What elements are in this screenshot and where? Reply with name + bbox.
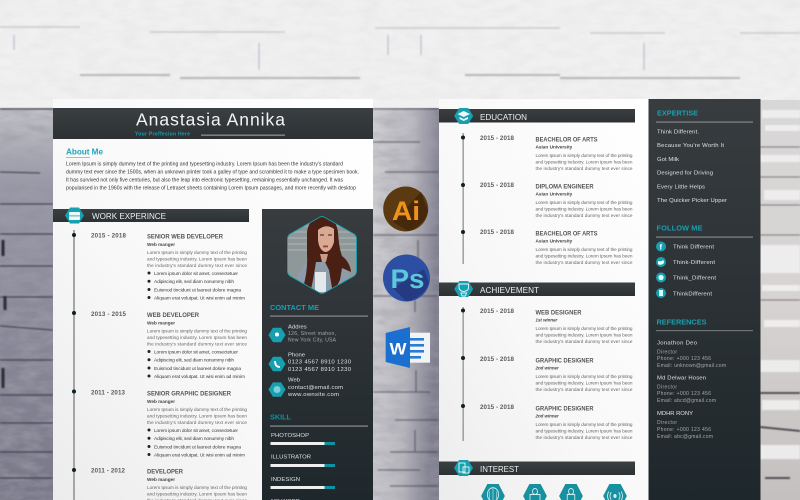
job: web developer: Web manger <box>147 320 175 326</box>
achievement: graphic designer <box>480 356 633 392</box>
job: developer <box>91 468 247 500</box>
job: senior graphic designer: and typesetting industry. Lorem Ipsum has been <box>147 414 247 418</box>
contact: address: Addres <box>288 324 307 330</box>
contact: web: contact@email.com <box>288 385 343 391</box>
interest: signal <box>603 484 627 500</box>
reference: MDHR RONY <box>657 411 713 440</box>
about me: It has survived not only five centuries, but also the leap into electronic typesetting, remaining essentially unchanged. It was <box>66 178 343 184</box>
contact: address: 126, Street mahon, <box>288 331 336 337</box>
job: senior graphic designer: Lorem ipsum dolor sit amet, consectetuer <box>154 428 238 434</box>
expertise list: Designed for Driving <box>657 170 713 176</box>
heading: interest <box>439 460 635 476</box>
job: senior web developer: 2015 - 2018 <box>91 232 127 240</box>
icon: Adobe Illustrator <box>383 186 428 232</box>
education: diploma engineer: DIPLOMA ENGINEER <box>536 184 594 190</box>
contact: phone: 0123 4567 8910 1230 <box>288 367 352 373</box>
contact: address <box>268 324 337 344</box>
heading: work experience: WORK EXPERINCE <box>92 212 166 221</box>
social: facebook: f <box>660 242 662 252</box>
job: senior web developer: SENIOR WEB DEVELOPER <box>147 234 224 240</box>
panel: right resume page <box>439 99 649 500</box>
expertise list <box>656 108 753 204</box>
reference: Md Delwar Hosen: Phone: +000 123 456 <box>657 391 711 397</box>
header band: Anastasia Annika <box>136 110 285 130</box>
reference: Md Delwar Hosen: Md Delwar Hosen <box>657 376 706 382</box>
job: developer: DEVELOPER <box>147 468 183 476</box>
interest: figure <box>559 484 583 500</box>
job: developer: Lorem Ipsum is simply dummy text of the printing <box>147 485 247 490</box>
timeline: work <box>72 230 76 500</box>
achievement: web designer: Lorem Ipsum is simply dummy text of the printing <box>536 326 633 331</box>
job: senior graphic designer: Aliquam erat volutpat. Ut wisi enim ad minim <box>154 452 245 458</box>
job: senior graphic designer: SENIOR GRAPHIC DESIGNER <box>147 390 232 398</box>
reference: Jonathon Deo: Director <box>657 350 677 356</box>
heading: achievement <box>439 281 635 297</box>
job: senior graphic designer: Lorem Ipsum is simply dummy text of the printing <box>147 407 247 412</box>
expertise list: Every Little Helps <box>657 184 705 190</box>
job: senior web developer: Lorem Ipsum is simply dummy text of the printing <box>147 250 247 255</box>
education: beachelor of arts second: 2015 - 2018 <box>480 229 515 236</box>
education: beachelor of arts second <box>480 229 633 265</box>
job: senior graphic designer: Adipiscing elit, sed diam nonummy nibh <box>154 436 234 442</box>
job: web developer: Euismod tincidunt ut laoreet dolore magna <box>154 366 241 372</box>
reference: Md Delwar Hosen: Email: abcd@gmail.com <box>657 398 716 404</box>
about me: popularised in the 1960s with the release of Letraset sheets containing Lorem Ipsum passages, and more recently with desktop <box>66 186 356 192</box>
education: beachelor of arts: 2015 - 2018 <box>480 135 515 142</box>
skill bars: SKILL <box>270 412 291 422</box>
contact: phone: 0123 4567 8910 1230 <box>288 360 352 366</box>
achievement: graphic designer second: 2nd winner <box>534 413 559 418</box>
job: senior web developer: Web manger <box>147 242 175 247</box>
job: senior graphic designer <box>91 390 247 458</box>
job: senior web developer <box>91 232 247 302</box>
reference: Jonathon Deo: Phone: +000 123 456 <box>657 356 711 362</box>
about me <box>66 148 359 192</box>
about me: Lorem Ipsum is simply dummy text of the printing and typesetting industry. Lorem Ipsum has been the industry's standard <box>66 162 343 168</box>
achievement: graphic designer second: and typesetting industry. Lorem Ipsum has been <box>536 428 633 434</box>
education: diploma engineer: Lorem Ipsum is simply dummy text of the printing <box>536 200 633 205</box>
job: web developer: WEB DEVELOPER <box>147 312 199 319</box>
reference: Jonathon Deo: Email: unknown@gmail.com <box>657 363 726 369</box>
reference: MDHR RONY: MDHR RONY <box>657 411 693 417</box>
achievement: graphic designer second: 2015 - 2018 <box>480 404 515 411</box>
reference: MDHR RONY: Phone: +000 123 456 <box>657 427 711 433</box>
job: senior web developer: Lorem ipsum dolor sit amet, consectetuer <box>154 271 238 277</box>
heading: education: EDUCATION <box>480 113 527 122</box>
contact: phone <box>268 352 352 373</box>
education: beachelor of arts second: Asian University <box>536 238 573 244</box>
job: senior web developer: Aliquam erat volutpat. Ut wisi enim ad minim <box>154 296 245 302</box>
panel: left sidebar <box>262 209 373 500</box>
icon: Adobe Photoshop <box>383 254 430 302</box>
achievement: web designer: WEB DESIGNER <box>536 310 582 316</box>
about me: dummy text ever since the 1500s, when an unknown printer took a galley of type and scrambled it to make a type specimen book. <box>66 170 359 176</box>
job: web developer: and typesetting industry. Lorem Ipsum has been <box>147 335 247 340</box>
job: senior graphic designer: 2011 - 2013 <box>91 390 126 396</box>
achievement: web designer: 1st winner <box>536 317 558 322</box>
achievement: web designer <box>480 308 633 344</box>
skill bars: INDESIGN <box>271 477 300 483</box>
achievement: graphic designer: Lorem Ipsum is simply dummy text of the printing <box>536 374 633 379</box>
job: developer: 2011 - 2012 <box>91 468 126 474</box>
achievement: graphic designer second <box>480 404 633 440</box>
education: beachelor of arts second: BEACHELOR OF ARTS <box>536 230 598 238</box>
education: beachelor of arts: Asian University <box>536 144 573 150</box>
skill bars: PHOTOSHOP <box>271 433 309 439</box>
interest: people <box>523 484 547 500</box>
job: senior graphic designer: the industry's standard dummy text ever since <box>147 420 247 425</box>
education: diploma engineer <box>480 182 633 218</box>
achievement: graphic designer: 2nd winner <box>534 365 559 370</box>
education: beachelor of arts: the industry's standard dummy text ever since <box>536 166 633 171</box>
achievement: graphic designer second: Lorem Ipsum is simply dummy text of the printing <box>536 422 633 427</box>
job: web developer: 2013 - 2015 <box>91 311 127 318</box>
job: web developer <box>91 311 247 380</box>
education: beachelor of arts <box>480 135 633 171</box>
reference: Jonathon Deo: Jonathon Deo <box>657 340 698 346</box>
reference: Md Delwar Hosen: Director <box>657 384 677 390</box>
timeline: education <box>461 133 465 264</box>
social: facebook: Think Different <box>673 244 714 250</box>
social: facebook <box>656 242 714 252</box>
achievement: graphic designer: the industry's standard dummy text ever since <box>536 387 633 392</box>
reference: Jonathon Deo <box>657 340 726 369</box>
heading: education <box>439 108 635 124</box>
expertise list: Got Milk <box>657 157 679 163</box>
contact me: CONTACT ME <box>270 303 319 312</box>
contact: web <box>268 378 343 398</box>
contact: web: Web <box>288 378 301 384</box>
icon: Adobe Photoshop: Ps <box>390 264 424 294</box>
reference: MDHR RONY: Director <box>657 420 677 426</box>
contact: address: New York City, USA <box>288 338 337 344</box>
job: senior graphic designer: Euismod tincidunt ut laoreet dolore magna <box>154 444 241 450</box>
panel: left resume page <box>53 99 373 500</box>
expertise list: Because You're Worth It <box>657 143 724 149</box>
achievement: graphic designer second: the industry's standard dummy text ever since <box>536 435 633 440</box>
about me: About Me <box>66 148 103 156</box>
job: senior web developer: the industry's standard dummy text ever since <box>147 263 247 268</box>
education: beachelor of arts: and typesetting industry. Lorem Ipsum has been <box>536 160 633 164</box>
job: developer: Web manger <box>147 477 175 482</box>
references <box>656 318 753 440</box>
portrait photo <box>287 216 357 294</box>
heading: achievement: ACHIEVEMENT <box>480 286 539 295</box>
reference: Md Delwar Hosen <box>657 376 716 404</box>
job: senior web developer: Euismod tincidunt ut laoreet dolore magna <box>154 288 241 294</box>
achievement: web designer: and typesetting industry. Lorem Ipsum has been <box>536 332 633 338</box>
social: skype: ThinkDifferent <box>673 292 712 298</box>
job: senior graphic designer: Web manger <box>147 399 175 404</box>
icon: Microsoft Word: W <box>390 340 408 358</box>
icon: Adobe Illustrator: Ai <box>392 196 420 226</box>
header band: Your Proffesion Here <box>135 132 190 138</box>
job: web developer: the industry's standard dummy text ever since <box>147 342 247 346</box>
education: beachelor of arts second: Lorem Ipsum is simply dummy text of the printing <box>536 247 633 252</box>
follow me <box>656 224 753 298</box>
education: diploma engineer: and typesetting industry. Lorem Ipsum has been <box>536 206 633 212</box>
social: twitter: Think-Different <box>673 260 715 266</box>
follow me: FOLLOW ME <box>656 224 703 232</box>
education: diploma engineer: the industry's standard dummy text ever since <box>536 213 633 218</box>
job: developer: and typesetting industry. Lorem Ipsum has been <box>147 492 247 496</box>
job: senior web developer: and typesetting industry. Lorem Ipsum has been <box>147 256 247 262</box>
achievement: web designer: the industry's standard dummy text ever since <box>536 339 633 344</box>
contact: web: www.ownsite.com <box>287 392 339 398</box>
job: web developer: Lorem ipsum dolor sit amet, consectetuer <box>154 350 238 356</box>
achievement: graphic designer: GRAPHIC DESIGNER <box>536 358 594 364</box>
expertise list: EXPERTISE <box>657 108 698 118</box>
references: REFERENCES <box>656 318 707 326</box>
achievement: graphic designer: and typesetting industry. Lorem Ipsum has been <box>536 380 633 386</box>
education: diploma engineer: 2015 - 2018 <box>480 182 515 189</box>
job: web developer: Lorem Ipsum is simply dummy text of the printing <box>147 328 247 334</box>
job: senior web developer: Adipiscing elit, sed diam nonummy nibh <box>154 279 234 285</box>
expertise list: Think Different. <box>657 130 699 136</box>
reference: MDHR RONY: Email: abc@gmail.com <box>657 434 713 440</box>
job: web developer: Aliquam erat volutpat. Ut wisi enim ad minim <box>154 374 245 380</box>
achievement: graphic designer: 2015 - 2018 <box>480 356 515 363</box>
panel: right sidebar <box>648 99 760 500</box>
education: diploma engineer: Asian University <box>536 192 573 196</box>
job: web developer: Adipiscing elit, sed diam nonummy nibh <box>154 358 234 364</box>
education: beachelor of arts second: and typesetting industry. Lorem Ipsum has been <box>536 254 633 258</box>
education: beachelor of arts second: the industry's standard dummy text ever since <box>536 260 633 265</box>
header band <box>53 108 373 139</box>
skill bars <box>270 412 368 500</box>
contact me <box>268 303 368 398</box>
icon: Microsoft Word <box>386 327 430 368</box>
social: instagram: Think_Different <box>673 276 716 282</box>
heading: work experience <box>53 208 249 224</box>
education: beachelor of arts: BEACHELOR OF ARTS <box>536 136 598 144</box>
achievement: web designer: 2015 - 2018 <box>480 308 515 315</box>
contact: phone: Phone <box>288 352 306 358</box>
interest: art <box>481 484 505 500</box>
achievement: graphic designer second: GRAPHIC DESIGNER <box>536 406 594 412</box>
skill bars: ILLUSTRATOR <box>271 454 311 460</box>
heading: interest: INTEREST <box>480 465 519 474</box>
education: beachelor of arts: Lorem Ipsum is simply dummy text of the printing <box>536 153 633 158</box>
icons: interests <box>481 484 627 500</box>
timeline: achievement <box>461 307 465 441</box>
expertise list: The Quicker Picker Upper <box>657 198 727 204</box>
